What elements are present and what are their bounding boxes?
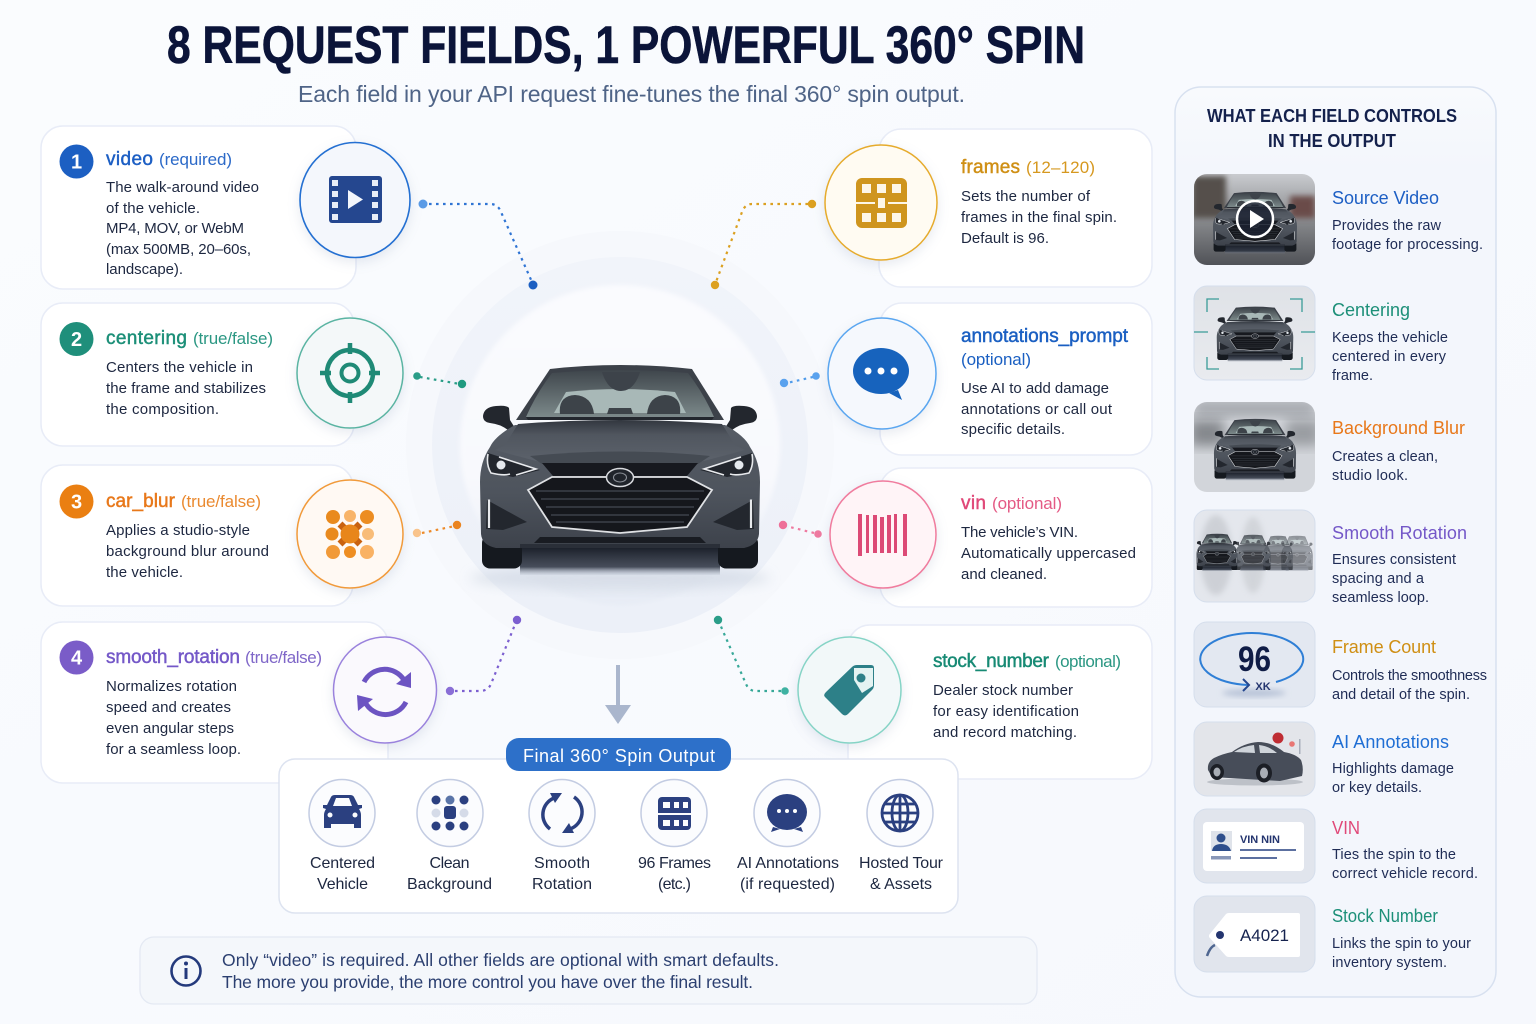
text: VIN: correct vehicle record. (1332, 866, 1478, 882)
thumbnail: frame count: XK (1255, 681, 1271, 693)
panel: car_blur card: background blur around (106, 543, 269, 560)
text: centering: Centering (1332, 300, 1410, 320)
panel: car_blur card: the vehicle. (106, 564, 183, 581)
thumbnail: background blur (1190, 402, 1320, 492)
text: stock number: Links the spin to your (1332, 936, 1471, 952)
text: source video (1332, 188, 1483, 253)
arrow: down to output (605, 665, 631, 724)
text: centering: Keeps the vehicle (1332, 330, 1448, 346)
output badge (506, 738, 731, 771)
text: background blur: Creates a clean, (1332, 449, 1438, 465)
thumbnail: smooth rotation (1194, 510, 1315, 602)
panel: centering card (41, 303, 354, 446)
panel heading: IN THE OUTPUT (1268, 130, 1397, 151)
icon: barcode (830, 481, 936, 588)
panel: annotations_prompt card (880, 303, 1152, 455)
thumbnail: VIN card: VIN NIN (1240, 834, 1280, 846)
thumbnail: frame count: 96 (1238, 640, 1271, 679)
title: 8 REQUEST FIELDS, 1 POWERFUL 360° SPIN (167, 16, 1085, 75)
panel: centering card: 2 (71, 329, 82, 351)
text: frame count (1332, 637, 1487, 703)
text: VIN: Ties the spin to the (1332, 847, 1456, 863)
item: hosted tour (859, 780, 944, 893)
text: AI annotations (1332, 732, 1454, 796)
panel: annotations_prompt card: Use AI to add damage (961, 380, 1109, 397)
text: AI annotations: Highlights damage (1332, 761, 1454, 777)
panel: frames card: Sets the number of (961, 188, 1091, 205)
thumbnail: centering (1194, 286, 1315, 380)
panel: video card: of the vehicle. (106, 200, 200, 217)
connector: video (418, 200, 538, 290)
panel: stock_number card: stock_number (933, 651, 1050, 672)
panel: vin card: and cleaned. (961, 566, 1047, 583)
text: frame count: Frame Count (1332, 637, 1436, 657)
connector: smooth_rotation (446, 616, 521, 695)
item: centered vehicle: Centered (310, 855, 375, 872)
panel: stock_number card: for easy identification (933, 703, 1079, 720)
panel: stock_number card: Dealer stock number (933, 682, 1073, 699)
panel: annotations_prompt card: annotations_prompt (961, 326, 1129, 347)
panel: vin card (880, 468, 1152, 607)
icon: chat bubble (828, 318, 936, 429)
panel: vin card: The vehicle’s VIN. (961, 524, 1078, 541)
panel: vin card: (optional) (992, 494, 1062, 513)
thumbnail: AI annotations (1194, 722, 1315, 796)
text: source video: Source Video (1332, 188, 1439, 208)
panel: video card: (required) (159, 150, 232, 169)
callout: info note: The more you provide, the more control you have over the final result. (222, 972, 753, 992)
panel: centering card: centering (106, 328, 187, 349)
item: AI annotations (737, 780, 839, 893)
icon: rotation (334, 637, 436, 743)
text: source video: footage for processing. (1332, 237, 1483, 253)
panel: stock_number card (848, 625, 1152, 779)
item: clean background: Clean (430, 855, 470, 872)
text: background blur (1332, 418, 1465, 484)
text: smooth rotation: Smooth Rotation (1332, 523, 1467, 543)
connector: annotations (780, 372, 820, 387)
panel: centering card: the composition. (106, 401, 219, 418)
text: centering (1332, 300, 1448, 384)
text: VIN (1332, 818, 1478, 882)
panel heading: WHAT EACH FIELD CONTROLS (1207, 105, 1457, 126)
text: centering: frame. (1332, 368, 1373, 384)
text: AI annotations: AI Annotations (1332, 732, 1449, 752)
icon: blur dots (297, 480, 403, 588)
panel: centering card: (true/false) (193, 329, 273, 348)
text: AI annotations: or key details. (1332, 780, 1422, 796)
panel: smooth_rotation card: smooth_rotation (106, 647, 240, 668)
callout: info note (140, 937, 1037, 1004)
thumbnail: frame count (1194, 622, 1315, 707)
text: stock number (1332, 906, 1471, 971)
panel: smooth_rotation card: Normalizes rotation (106, 678, 237, 695)
panel: centering card: Centers the vehicle in (106, 359, 253, 376)
panel: annotations_prompt card: annotations or call out (961, 401, 1113, 418)
panel: video card (41, 126, 356, 289)
text: source video: Provides the raw (1332, 218, 1442, 234)
text: frame count: and detail of the spin. (1332, 687, 1470, 703)
item: smooth rotation (529, 780, 595, 893)
icon: target (297, 318, 403, 428)
item: centered vehicle (309, 780, 375, 893)
panel: smooth_rotation card: 4 (71, 648, 83, 670)
thumbnail: stock tag (1194, 896, 1315, 972)
item: 96 frames: (etc.) (658, 876, 691, 893)
icon: price tag (798, 637, 901, 743)
panel: frames card: (12–120) (1026, 158, 1095, 177)
text: background blur: studio look. (1332, 468, 1408, 484)
panel: stock_number card: and record matching. (933, 724, 1077, 741)
concentric rings behind car (406, 231, 834, 659)
text: smooth rotation: Ensures consistent (1332, 552, 1456, 568)
panel: annotations_prompt card: (optional) (961, 350, 1031, 369)
panel: video card: MP4, MOV, or WebM (106, 220, 244, 237)
panel: car_blur card: car_blur (106, 491, 176, 512)
panel heading (1207, 105, 1457, 151)
text: stock number: Stock Number (1332, 906, 1438, 926)
icon: frames grid (825, 145, 937, 260)
connector: stock_number (714, 616, 789, 695)
panel: smooth_rotation card: speed and creates (106, 699, 231, 716)
panel: frames card: frames (961, 157, 1020, 178)
item: clean background (407, 780, 492, 893)
text: smooth rotation: spacing and a (1332, 571, 1425, 587)
panel: what each field controls (1175, 87, 1496, 997)
icon: info (172, 956, 200, 986)
panel: frames card: frames in the final spin. (961, 209, 1117, 226)
text: smooth rotation: seamless loop. (1332, 590, 1429, 606)
panel: car_blur card: Applies a studio-style (106, 522, 250, 539)
icon: video (300, 142, 410, 258)
item: clean background: Background (407, 876, 492, 893)
panel: vin card: Automatically uppercased (961, 545, 1136, 562)
item: 96 frames (638, 780, 711, 893)
callout: info note: Only “video” is required. All other fields are optional with smart defaults. (222, 950, 779, 970)
panel: video card: 1 (71, 152, 82, 174)
connector: car_blur (413, 521, 461, 537)
subtitle: Each field in your API request fine-tunes the final 360° spin output. (298, 81, 965, 107)
panel: smooth_rotation card (41, 622, 388, 783)
panel: annotations_prompt card: specific details. (961, 421, 1065, 438)
thumbnail: VIN card (1194, 809, 1315, 883)
panel: car_blur card: 3 (71, 492, 82, 514)
item: smooth rotation: Rotation (532, 876, 592, 893)
panel: video card: landscape). (106, 261, 183, 278)
text: centering: centered in every (1332, 349, 1447, 365)
panel: smooth_rotation card: (true/false) (245, 648, 322, 667)
connector: centering (413, 372, 466, 388)
output badge: Final 360° Spin Output (523, 746, 715, 766)
panel: stock_number card: (optional) (1055, 652, 1121, 671)
item: hosted tour: Hosted Tour (859, 855, 944, 872)
connector: frames (711, 200, 816, 289)
panel: frames card: Default is 96. (961, 230, 1049, 247)
car image (470, 365, 770, 590)
panel: car_blur card: (true/false) (181, 492, 261, 511)
panel: smooth_rotation card: even angular steps (106, 720, 234, 737)
text: background blur: Background Blur (1332, 418, 1465, 438)
panel: final output (279, 738, 958, 913)
panel: video card: (max 500MB, 20–60s, (106, 241, 251, 258)
panel: car_blur card (41, 465, 353, 606)
panel: video card: The walk-around video (106, 179, 259, 196)
connector: vin (779, 521, 822, 538)
item: AI annotations: AI Annotations (737, 855, 839, 872)
text: VIN: VIN (1332, 818, 1360, 838)
item: centered vehicle: Vehicle (317, 876, 368, 893)
panel: centering card: the frame and stabilizes (106, 380, 266, 397)
item: smooth rotation: Smooth (534, 855, 590, 872)
panel: video card: video (106, 149, 153, 170)
thumbnail: stock tag: A4021 (1240, 926, 1289, 945)
panel: vin card: vin (961, 493, 986, 514)
text: frame count: Controls the smoothness (1332, 668, 1487, 684)
item: hosted tour: & Assets (870, 876, 932, 893)
text: smooth rotation (1332, 523, 1467, 606)
item: 96 frames: 96 Frames (638, 855, 711, 872)
text: stock number: inventory system. (1332, 955, 1447, 971)
thumbnail: source video (1192, 174, 1315, 265)
item: AI annotations: (if requested) (740, 876, 835, 893)
panel: frames card (879, 129, 1152, 287)
panel: smooth_rotation card: for a seamless loop. (106, 741, 241, 758)
